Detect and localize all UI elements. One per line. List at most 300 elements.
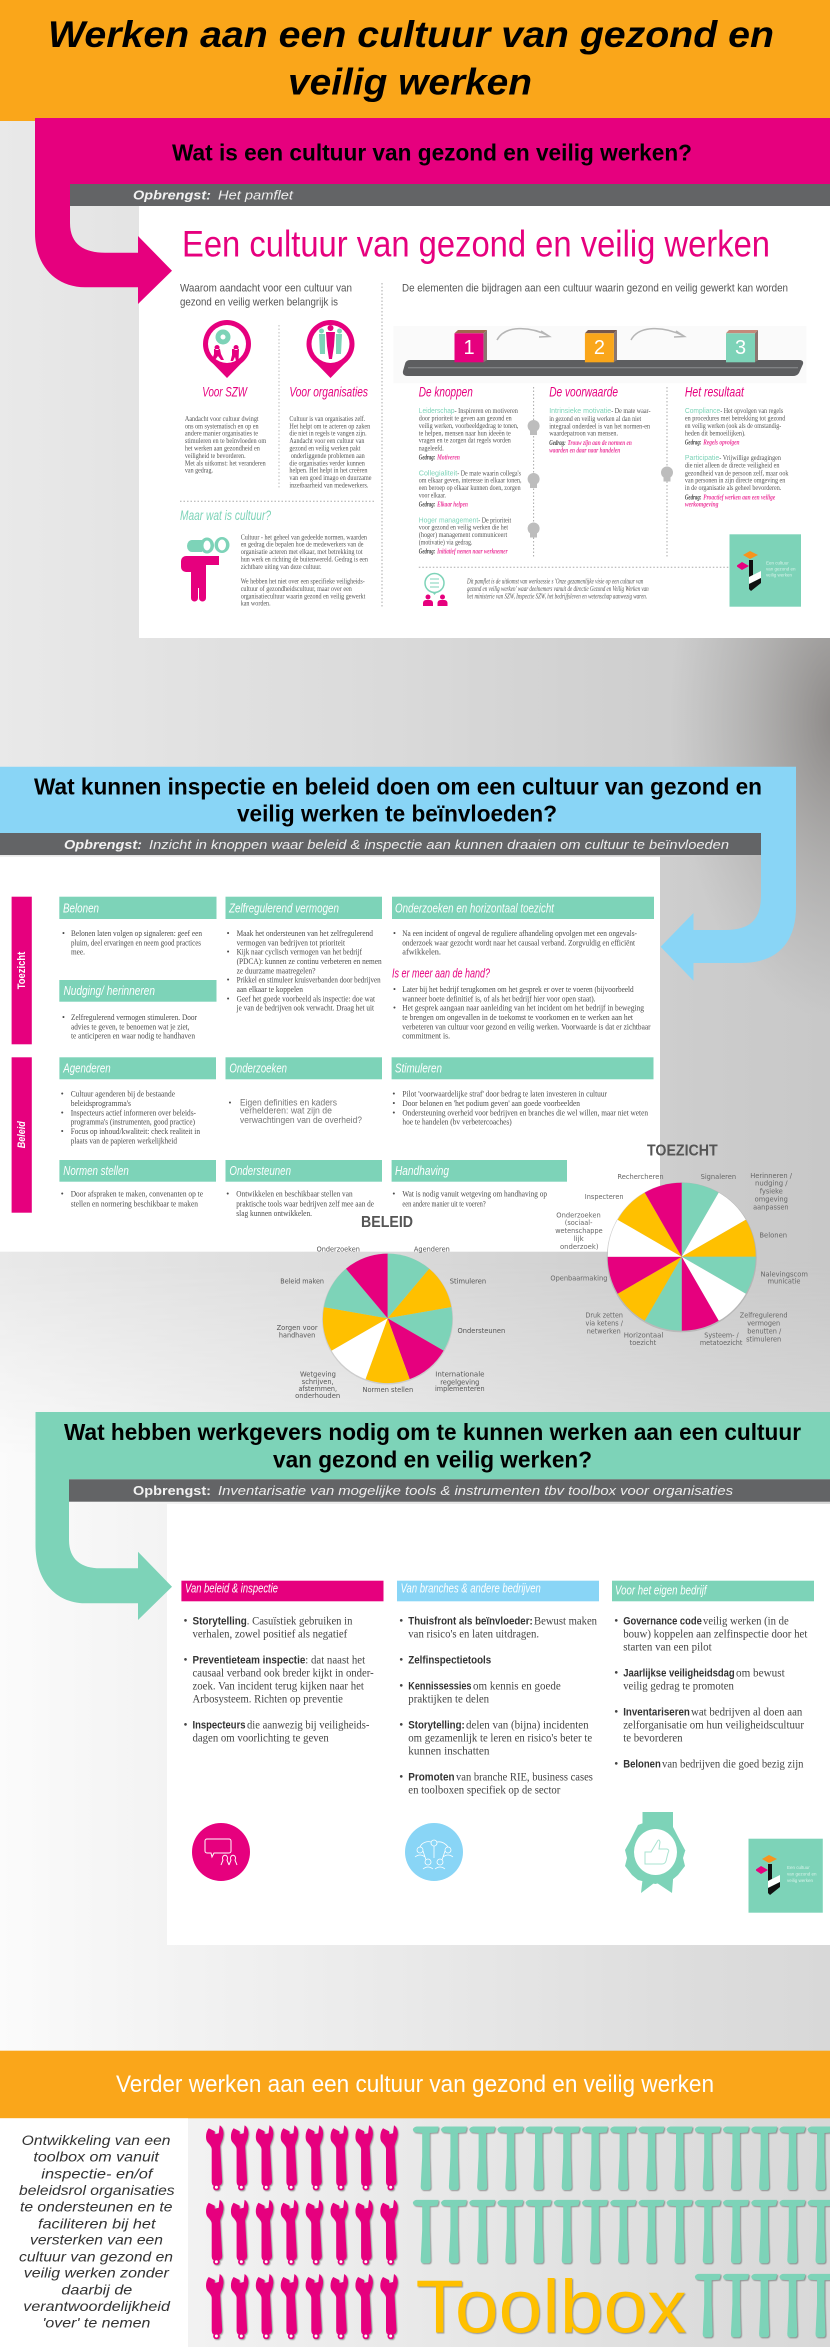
text column: de knoppen: (motivatie) via gedrag. [419,538,472,547]
arrow: block 2 to 3 [631,329,684,340]
card: onderzoeken [226,1057,382,1125]
column: van branches & andere bedrijven: om kennis en goede [473,1680,561,1692]
column: van beleid & inspectie: . Casuïstiek gebruiken in [247,1615,353,1627]
text: definitie cultuur: zichtbare uiting van deze cultuur. [241,562,322,571]
column: van beleid & inspectie: Preventieteam inspectie [192,1654,305,1666]
pie chart: toezicht: via ketens / [586,1318,623,1327]
text: voor SZW: Met als uitkomst: het veranderen [185,458,266,467]
card: agenderen: programma's (instrumenten, good practice) [71,1118,195,1127]
text column: de knoppen: Leiderschap [419,406,454,415]
text: voor organisaties: helpen. Het helpt in het creëren [289,466,368,475]
card: belonen: Belonen [63,901,99,915]
card: nudging / herinneren: Zelfregulerend vermogen stimuleren. Door [71,1013,197,1022]
section 1 yield bar: Het pamflet [218,187,295,202]
text column: het resultaat [685,406,789,509]
card: agenderen: Cultuur agenderen bij de bestaande [71,1090,175,1099]
text column: de knoppen: Motiveren [436,452,460,461]
text: voor SZW [185,414,266,475]
bottom band: verder werken: Verder werken aan een cultuur van gezond en veilig werken [116,2071,714,2098]
sub-heading: is er meer aan de hand: Is er meer aan de hand? [392,967,490,981]
pie chart: toezicht: netwerken [587,1326,621,1335]
pie chart: toezicht: Belonen [759,1230,787,1239]
text column: de knoppen [419,406,522,556]
chart title: beleid: BELEID [361,1214,413,1231]
pie chart: toezicht: nudging / [755,1179,788,1188]
icon: pin with gear and workers [203,320,251,378]
text column: het resultaat: Compliance [685,406,720,415]
card: onderzoeken en horizontaal toezicht [392,897,654,1041]
left text panel: toolbox description: inspectie- en/of [41,2165,155,2181]
pie chart: toezicht [550,1142,808,1347]
card: zelfregulerend vermogen: vermogen van bedrijven tot prioriteit [237,938,346,947]
column: voor het eigen bedrijf: van bedrijven die goed bezig zijn [662,1758,804,1770]
card: handhaving: • [392,1190,395,1199]
pie chart: toezicht: omgeving [755,1195,788,1204]
column: van beleid & inspectie: verhalen, zowel positief als negatief [192,1628,347,1640]
card: onderzoeken: Eigen definities en kaders [240,1097,337,1107]
pie chart: toezicht: stimuleren [746,1334,781,1343]
column: van beleid & inspectie: Arbosysteem. Richten op preventie [192,1693,343,1705]
text: definitie cultuur: kan worden. [241,599,271,608]
pie chart: toezicht: Systeem- / [704,1331,739,1340]
pie chart: toezicht: aanpassen [753,1203,789,1212]
card: zelfregulerend vermogen: je van de bedrijven ook verwacht. Draag het uit [236,1004,375,1013]
green logo card [748,1839,823,1913]
column: voor het eigen bedrijf: Belonen [623,1758,661,1770]
left text panel: toolbox description: beleidsrol organisaties [19,2182,175,2198]
text: voor organisaties: onderliggende problemen aan [291,451,365,460]
column: van branches & andere bedrijven: delen van (bijna) incidenten [466,1719,589,1731]
column: voor het eigen bedrijf: • [614,1667,618,1679]
text: voor organisaties: Het helpt om te acteren op zaken [289,421,370,430]
card: zelfregulerend vermogen [226,897,382,1013]
text column: het resultaat: heden dit bemoeilijken). [685,428,746,437]
icon: pink speech bubble circle [192,1823,250,1881]
heading: voor organisaties: Voor organisaties [289,384,368,400]
green logo card: veilig werken [766,573,793,578]
section 3 question: van gezond en veilig werken? [273,1446,592,1472]
column: van branches & andere bedrijven: • [399,1654,403,1666]
pamphlet right intro: De elementen die bijdragen aan een cultuur waarin gezond en veilig gewerkt kan worden [402,283,788,295]
column: van branches & andere bedrijven: • [399,1771,403,1783]
column: van branches & andere bedrijven: kunnen inschatten [408,1745,490,1757]
card: agenderen: Agenderen [63,1062,111,1076]
left text panel: toolbox description: cultuur van gezond en [19,2248,173,2264]
side bar: toezicht: Toezicht [16,951,28,989]
column heading: de voorwaarde: De voorwaarde [549,384,618,400]
text column: het resultaat: die niet alleen de directe veiligheid en [685,461,780,470]
footnote: Dit pamflet is de uitkomst van werksessie s 'Onze gezamenlijke visie op een cultuur van [466,577,643,586]
card: agenderen: Inspecteurs actief informeren over beleids- [71,1108,196,1117]
text column: het resultaat: Participatie [685,453,719,462]
pie chart: toezicht: Horizontaal [624,1331,663,1340]
section 2 question: Wat kunnen inspectie en beleid doen om een cultuur van gezond en [34,773,762,799]
text column: het resultaat: Gedrag: [685,492,701,501]
text column: de knoppen: te helpen, mensen naar hun ideeën te [419,428,511,437]
card: onderzoeken en horizontaal toezicht: verbeteren van cultuur voor gezond en veilig werken. Voorwaarde is dat er zichtbaar [402,1022,651,1031]
text: voor organisaties [289,414,372,490]
text: voor organisaties: gezond en veilig werken pakt [289,444,361,453]
card: nudging / herinneren: te anticiperen en waar nodig te handhaven [71,1032,196,1041]
block 2 [585,330,617,362]
card: normen stellen: • [61,1190,64,1199]
toolbox word: Toolbox [416,2265,687,2347]
text column: de knoppen: - De prioriteit [478,515,512,524]
column: voor het eigen bedrijf: • [614,1758,618,1770]
pie chart: beleid: onderhouden [295,1391,340,1400]
text: voor organisaties: die niet in regels te vangen zijn. [289,429,367,438]
card: stimuleren: Stimuleren [395,1062,442,1076]
pie chart: beleid: Stimuleren [450,1276,486,1285]
text: voor SZW: ons om systematisch en op en [185,421,259,430]
text column: de voorwaarde [549,406,651,454]
text column: het resultaat: - Het opvolgen van regels [720,406,783,415]
column: van beleid & inspectie: Van beleid & inspectie [185,1582,278,1596]
card: zelfregulerend vermogen: ze duurzame maatregelen? [237,966,316,975]
card: normen stellen: stellen en normering beschikbaar te maken [71,1199,199,1208]
pie chart: toezicht: municatie [768,1277,801,1286]
pie chart: toezicht: Openbaarmaking [550,1274,608,1283]
column: van branches & andere bedrijven: Storytelling: [408,1719,465,1731]
text: voor organisaties: die organisaties verder kunnen [289,458,365,467]
column: voor het eigen bedrijf: om bewust [736,1667,786,1679]
column: voor het eigen bedrijf: veilig gedrag te promoten [623,1680,734,1692]
icons: grey heads [528,420,673,538]
text column: de knoppen: voor gezond en veilig werken die het [419,523,509,532]
card: onderzoeken: verhelderen: wat zijn de [240,1106,332,1116]
card: zelfregulerend vermogen: • [227,994,230,1003]
card: zelfregulerend vermogen: Maak het ondersteunen van het zelfregulerend [237,929,374,938]
column: van branches & andere bedrijven: Bewust maken [534,1615,597,1627]
text column: de knoppen: Elkaar helpen [436,499,468,508]
text column: de knoppen: vragen en te zorgen dat regels worden [419,436,511,445]
column: voor het eigen bedrijf: starten van een pilot [623,1641,712,1653]
pie chart: toezicht: fysieke [760,1187,783,1196]
text: voor SZW: stimuleren en te beïnvloeden om [185,436,266,445]
text column: de knoppen: Collegialiteit [419,468,458,477]
pie chart: beleid: regelgeving [440,1377,480,1386]
card: onderzoeken: Onderzoeken [229,1062,287,1076]
block 1 [454,330,487,362]
card: zelfregulerend vermogen: Prikkel en stimuleer kruisverbanden door bedrijven [237,976,381,985]
blue arrow band [0,767,796,981]
card: nudging / herinneren: • [62,1013,65,1022]
text column: de knoppen: door prioriteit te geven aan gezond en [419,413,512,422]
pie chart: beleid: Agenderen [414,1245,450,1254]
text column: het resultaat: van personen in zijn directe omgeving en [685,476,785,485]
left text panel: toolbox description: te ondersteunen en te [20,2199,173,2215]
card: stimuleren: hoe te handelen (bv verbetercoaches) [402,1118,512,1127]
pie chart: beleid [277,1214,505,1400]
pie chart: beleid: Internationale [435,1370,485,1379]
text: voor SZW: van gedrag. [185,466,213,475]
card: onderzoeken en horizontaal toezicht: Na een incident of ongeval de reguliere afhandeling opvolgen met een ongevals- [402,929,637,938]
text column: de voorwaarde: waarden en daar naar handelen [549,445,620,454]
card: normen stellen: Normen stellen [63,1164,129,1178]
card: ondersteunen: • [226,1190,229,1199]
pie chart: beleid: Normen stellen [362,1385,413,1394]
text column: de voorwaarde: - De mate waar- [611,406,651,415]
card: zelfregulerend vermogen: aan elkaar te koppelen [237,985,304,994]
card: agenderen: beleidsprogramma's [71,1099,131,1108]
pie chart: beleid: afstemmen, [298,1384,337,1393]
pie chart: toezicht: Inspecteren [585,1192,624,1201]
column: van branches & andere bedrijven: van risico's en laten uitdragen. [408,1628,539,1640]
text column: de voorwaarde: waardepatroon van mensen. [549,429,618,438]
card: stimuleren: Pilot 'voorwaardelijke straf' door bedrag te laten investeren in cultuur [402,1090,607,1099]
card: stimuleren: • [392,1090,395,1099]
text: voor SZW: veiligheid te bevorderen. [185,451,246,460]
main title: Werken aan een cultuur van gezond en [48,14,774,55]
pie chart: toezicht: Zelfregulerend [740,1311,788,1320]
block 1: 1 [463,337,475,359]
card: handhaving: Handhaving [395,1164,449,1178]
column: van branches & andere bedrijven: praktijken te delen [408,1693,489,1705]
card: onderzoeken en horizontaal toezicht: Onderzoeken en horizontaal toezicht [395,901,554,915]
icon: pin with people [306,320,354,378]
card: stimuleren: Ondersteuning overheid voor bedrijven en branches die wel willen, maar niet weten [402,1108,649,1117]
main title: veilig werken [288,62,532,103]
column: voor het eigen bedrijf: • [614,1706,618,1718]
block 3: 3 [735,337,746,359]
text column: de knoppen: (hoger) management communiceert [419,530,508,539]
text column: de voorwaarde: Trouw zijn aan de normen en [568,438,632,447]
block 2: 2 [594,337,605,359]
pie chart: toezicht: lijk [574,1234,584,1243]
section 2 yield bar: Inzicht in knoppen waar beleid & inspectie aan kunnen draaien om cultuur te beïnvloeden [149,837,729,852]
column: van branches & andere bedrijven: Thuisfront als beïnvloeder: [408,1615,533,1627]
card: zelfregulerend vermogen: (PDCA): kunnen ze continu verbeteren en nemen [237,957,382,966]
section 2 question [34,773,762,827]
column heading: het resultaat: Het resultaat [685,384,745,400]
card: ondersteunen: praktische tools waar bedrijven zelf mee aan de [236,1199,374,1208]
text column: het resultaat: Regels opvolgen [703,438,740,447]
left text panel: toolbox description: toolbox om vanuit [33,2149,160,2165]
section 3 question: Wat hebben werkgevers nodig om te kunnen werken aan een cultuur [64,1419,801,1445]
pie chart: toezicht: wetenschappe [555,1226,603,1235]
column: van branches & andere bedrijven [397,1581,599,1796]
section 3 yield bar: Opbrengst: [133,1483,211,1498]
pie chart: toezicht: Druk zetten [586,1311,623,1320]
text column: het resultaat: Gedrag: [685,438,701,447]
column: voor het eigen bedrijf: bouw) koppelen aan zelfinspectie door het [623,1628,808,1640]
pie chart: toezicht: toezicht [630,1338,656,1347]
text: voor SZW: het werken aan gezondheid en [185,444,260,453]
column: voor het eigen bedrijf: veilig werken (in de [703,1615,789,1627]
left text panel: toolbox description: Ontwikkeling van een [22,2132,171,2148]
section 1 white panel: pamphlet [139,206,830,638]
side bar: beleid: Beleid [16,1121,28,1148]
card: agenderen: Focus op inhoud/kwaliteit: check realiteit in [71,1127,201,1136]
card: ondersteunen: Ontwikkelen en beschikbaar stellen van [236,1190,353,1199]
left text panel: toolbox description: veilig werken zonder [24,2265,170,2281]
pink arrow band [35,118,830,304]
card: zelfregulerend vermogen: Zelfregulerend vermogen [228,901,339,915]
card: onderzoeken en horizontaal toezicht: Het gesprek aangaan naar aanleiding van het incident om het bedrijf in beweging [402,1004,645,1013]
card: nudging / herinneren: advies te geven, te benoemen wat je ziet, [71,1022,190,1031]
text column: het resultaat: werkomgeving [685,500,719,509]
pictogram: green hammers [413,2126,830,2337]
pictogram: pink wrenches [206,2125,398,2339]
pie chart: toezicht: Nalevingscom [760,1269,808,1278]
text column: het resultaat: en procedures met betrekking tot gezond [685,414,785,423]
card: onderzoeken en horizontaal toezicht: afwikkelen. [402,948,441,957]
card: handhaving: een andere manier uit te voeren? [402,1199,486,1208]
text column: de knoppen: - De mate waarin collega's [457,468,521,477]
text column: de knoppen: Gedrag: [419,452,435,461]
card: stimuleren: Door belonen en 'het podium geven' aan goede voorbeelden [402,1099,581,1108]
text column: de knoppen: voor elkaar. [419,490,446,499]
left text panel: toolbox description: faciliteren bij het [38,2215,157,2231]
pie chart: toezicht: benutten / [747,1326,782,1335]
left text panel: toolbox description [0,2118,188,2347]
heading: voor SZW: Voor SZW [202,384,248,400]
section 2 yield bar: Opbrengst: [64,837,142,852]
icon: discussion people [423,574,448,606]
card: belonen: • [62,929,65,938]
column: van beleid & inspectie: dagen om voorlichting te geven [192,1732,329,1744]
footnote: het ministerie van SZW, Inspectie SZW, het bedrijfsleven en wetenschap aanwezig waren. [467,591,647,600]
text: definitie cultuur: We hebben het niet over een specifieke veiligheids- [241,577,365,586]
card: zelfregulerend vermogen: Geef het goede voorbeeld als inspectie: doe wat [237,994,376,1003]
pie chart: beleid: Wetgeving [300,1370,336,1379]
card: stimuleren: • [392,1099,395,1108]
column: van branches & andere bedrijven: • [399,1719,403,1731]
pie chart: beleid: Onderzoeken [317,1245,360,1254]
card: onderzoeken en horizontaal toezicht: te brengen om ongevallen in de toekomst te voorkomen en te werken aan het [402,1013,634,1022]
text column: de knoppen: veilig werken, voorbeeldgedrag te tonen, [419,421,518,430]
text column: de knoppen: om elkaar geven, interesse in elkaar tonen, [419,476,522,485]
icon: blue network circle [405,1823,463,1881]
card: agenderen: plaats van de papieren werkelijkheid [71,1136,178,1145]
card: zelfregulerend vermogen: • [227,929,230,938]
section 3 yield bar: Inventarisatie van mogelijke tools & instrumenten tbv toolbox voor organisaties [218,1483,734,1498]
card: onderzoeken en horizontaal toezicht: wanneer boete definitief is, of als het bedrijf hier voor open staat). [402,994,596,1003]
section 1 yield bar: Opbrengst: [133,187,211,202]
text: definitie cultuur: Cultuur - het geheel van gedeelde normen, waarden [241,532,367,541]
text column: de knoppen: Gedrag: [419,547,435,556]
card: nudging / herinneren: Nudging/ herinneren [64,984,155,998]
arrow: block 1 to 2 [497,329,550,340]
column: voor het eigen bedrijf: te bevorderen [623,1732,683,1744]
card: belonen: mee. [71,948,85,957]
column: van beleid & inspectie: • [184,1719,188,1731]
bottom band: verder werken [0,2051,830,2118]
text column: de voorwaarde: in gezond en veilig werken al dan niet [549,414,642,423]
text column: het resultaat: in de organisatie als geheel bevorderen. [685,483,781,492]
left text panel: toolbox description: versterken van een [30,2232,163,2248]
pie chart: toezicht: (sociaal- [565,1218,593,1227]
section 2 yield bar [0,833,761,855]
card: agenderen [59,1057,216,1145]
card: onderzoeken en horizontaal toezicht: onderzoek waar gezocht wordt naar het causaal verband. Zorgvuldig en efficiënt [402,938,636,947]
card: belonen [59,897,216,957]
green arrow band [36,1412,830,1620]
section 3 white panel: werkgevers [167,1504,830,1945]
card: onderzoeken en horizontaal toezicht: • [393,985,396,994]
card: normen stellen [59,1160,216,1208]
text column: het resultaat: Proactief werken aan een veilige [703,492,776,501]
pie chart: beleid: handhaven [279,1330,315,1339]
card: ondersteunen [226,1160,382,1218]
text column: de voorwaarde: integraal onderdeel is van het normen-en [549,421,650,430]
text: definitie cultuur: hun werk en richting de buitenwereld. Gedrag is een [241,554,368,563]
card: zelfregulerend vermogen: • [227,948,230,957]
column: van branches & andere bedrijven: • [399,1615,403,1627]
column: voor het eigen bedrijf: Governance code [623,1615,702,1627]
green logo card: Een cultuur [787,1865,810,1870]
text: definitie cultuur: organisatiecultuur waarin gezond en veilig gewerkt [241,591,366,600]
text: definitie cultuur [241,532,368,608]
top header band [0,0,830,121]
column: voor het eigen bedrijf: zelforganisatie om hun veiligheidscultuur [623,1719,804,1731]
text column: de knoppen: - Inspireren en motiveren [454,406,518,415]
column: van beleid & inspectie: die aanwezig bij veiligheids- [247,1719,370,1731]
card: onderzoeken en horizontaal toezicht: • [393,929,396,938]
column: van beleid & inspectie [181,1581,384,1744]
column: van branches & andere bedrijven: Zelfinspectietools [408,1654,491,1666]
card: onderzoeken: verwachtingen van de overheid? [240,1115,362,1125]
card: handhaving: Wat is nodig vanuit wetgeving om handhaving op [402,1190,547,1199]
pie chart: toezicht: Herinneren / [750,1171,792,1180]
card: ondersteunen: Ondersteunen [229,1164,291,1178]
column: van beleid & inspectie: Inspecteurs [192,1719,246,1731]
column: van branches & andere bedrijven: om gezamenlijk te leren en risico's beter te [408,1732,592,1744]
column: van branches & andere bedrijven: Kennissessies [408,1680,472,1692]
text: voor organisaties: inzetbaarheid van medewerkers. [289,481,368,490]
column: van beleid & inspectie: • [184,1654,188,1666]
column: van beleid & inspectie: • [184,1615,188,1627]
icon: award badge with thumb [625,1812,685,1893]
text column: het resultaat: gezondheid van de persoon zelf, maar ook [685,468,789,477]
pie chart: toezicht: Rechercheren [617,1172,664,1181]
footnote: gezond en veilig werken' waar deelnemers vanuit de directie Gezond en Veilig Werken van [467,584,649,593]
icon: figure with binoculars [181,537,230,602]
side bar: beleid [12,1057,32,1213]
pie chart: beleid: schrijven, [302,1377,334,1386]
left text panel: toolbox description: daarbij de [61,2281,133,2297]
section 1 yield bar [70,184,830,206]
green logo card: veilig werken [787,1878,814,1883]
chart title: toezicht: TOEZICHT [647,1142,718,1159]
column: van beleid & inspectie: : dat naast het [305,1654,366,1666]
card: handhaving [392,1160,567,1208]
card: ondersteunen: slag kunnen ontwikkelen. [236,1209,312,1218]
section 3 question [64,1419,801,1472]
card: belonen: Belonen laten volgen op signaleren: geef een [71,929,203,938]
green logo card: Een cultuur [766,560,789,565]
column: van branches & andere bedrijven: • [399,1680,403,1692]
pamphlet left intro: Waarom aandacht voor een cultuur van [180,283,352,295]
card: onderzoeken: • [228,1098,232,1107]
card: nudging / herinneren [59,980,216,1041]
text column: de knoppen: Hoger management [419,515,479,524]
column: van beleid & inspectie: zoek. Van incident terug kijken naar het [192,1680,365,1692]
card: agenderen: • [61,1108,64,1117]
section 3 yield bar [69,1479,830,1502]
column heading: de knoppen: De knoppen [419,384,473,400]
text: voor SZW: andere manier organisaties te [185,429,259,438]
card: zelfregulerend vermogen: • [227,976,230,985]
text column: de knoppen: Gedrag: [419,499,435,508]
pie chart: beleid: Zorgen voor [277,1323,318,1332]
card: onderzoeken en horizontaal toezicht: commitment is. [402,1032,450,1041]
text: voor organisaties: Aandacht voor een cultuur van [289,436,365,445]
card: onderzoeken en horizontaal toezicht: • [393,1004,396,1013]
column: voor het eigen bedrijf [612,1581,814,1770]
pie chart: toezicht: metatoezicht [700,1338,742,1347]
pamphlet left intro: gezond en veilig werken belangrijk is [180,297,338,309]
